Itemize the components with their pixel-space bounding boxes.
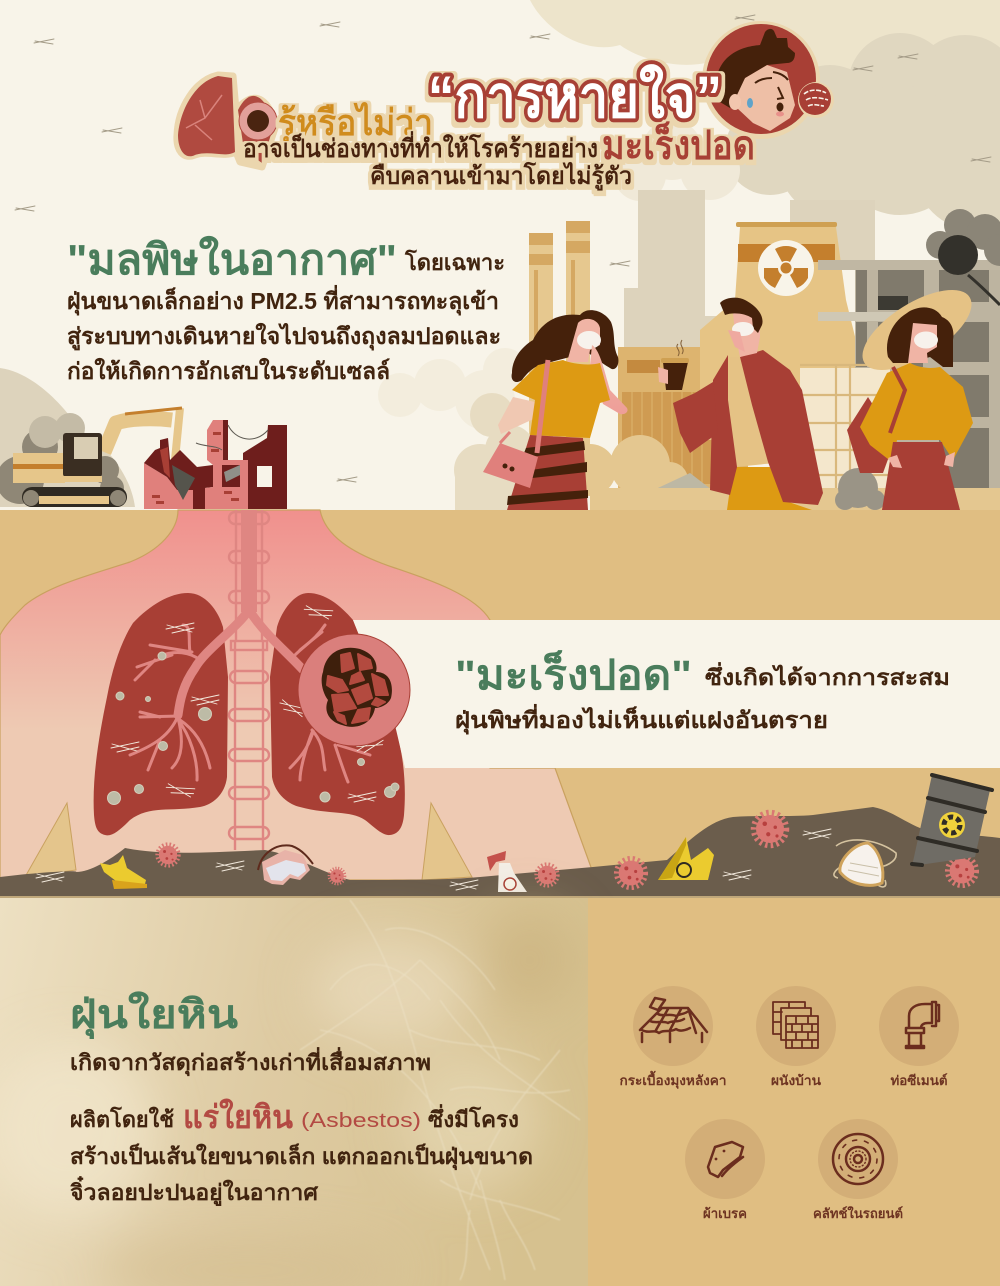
title line two: อาจเป็นช่องทางที่ทำให้โรคร้ายอย่าง: [243, 131, 598, 163]
cooling tower: [700, 227, 870, 440]
panel: lung cancer text: "มะเร็งปอด": [455, 650, 692, 698]
person: woman with bag: [483, 310, 628, 510]
title line two: มะเร็งปอด: [602, 120, 755, 168]
title lockup: [177, 21, 834, 191]
title line two: [243, 120, 755, 168]
person: man with coffee: [658, 298, 823, 510]
tan cloud by woman: [454, 393, 535, 510]
heading: air pollution text block: ก่อให้เกิดการอักเสบในระดับเซลล์: [67, 357, 390, 384]
asbestos text block: จิ๋วลอยปะปนอยู่ในอากาศ: [70, 1176, 319, 1207]
tall grey building: [624, 190, 760, 360]
ground with medical waste: [0, 775, 1000, 898]
asbestos background: [0, 898, 588, 1286]
icon: coughing man's face: [702, 21, 834, 139]
excavator: [13, 408, 195, 507]
ruined brick building: [144, 420, 287, 509]
smoke clouds top right: [530, 0, 1000, 230]
dust particles: [108, 652, 399, 804]
cream clouds middle: [378, 348, 527, 430]
icon: biohazard bag: [658, 837, 714, 880]
top background: [0, 0, 1000, 510]
heading: air pollution text block: "มลพิษในอากาศ": [67, 235, 397, 283]
title line one: รู้หรือไม่ว่า: [278, 101, 433, 146]
panel: lung cancer text: ซึ่งเกิดได้จากการสะสม: [705, 661, 950, 690]
icon: radiation symbol: [758, 240, 814, 296]
factory background: [529, 190, 1000, 510]
grey ruined building: [855, 268, 1000, 503]
icon: brake pad: ผ้าเบรค: [703, 1206, 747, 1221]
asbestos text block: ซึ่งมีโครง: [428, 1103, 519, 1132]
panel: lung cancer text: [353, 620, 1000, 768]
tan band background: [0, 510, 1000, 898]
icon: radioactive barrel: [912, 775, 992, 866]
icon: dust mask: [834, 840, 896, 887]
heading: air pollution text block: ฝุ่นขนาดเล็กอย่าง PM2.5 ที่สามารถทะลุเข้า: [67, 284, 499, 316]
asbestos text block: เกิดจากวัสดุก่อสร้างเก่าที่เสื่อมสภาพ: [70, 1046, 431, 1077]
icon: spray bottle: [487, 851, 527, 892]
asbestos text block: แร่ใยหิน: [183, 1098, 293, 1135]
icon: cement pipe: ท่อซีเมนต์: [890, 1073, 948, 1088]
person: woman with hat: [847, 274, 984, 510]
heading: air pollution text block: โดยเฉพาะ: [404, 249, 505, 275]
icon: lung with tumour: [177, 75, 277, 167]
icon: rubber gloves: [100, 855, 147, 889]
title line one: [278, 63, 722, 146]
fibres on ground: [36, 829, 831, 890]
dark smoke and wrecking ball: [926, 209, 1000, 266]
bronchi: [130, 610, 370, 782]
heading: air pollution text block: [67, 235, 505, 384]
icon: roof tiles: [620, 986, 726, 1089]
ground dust clouds: [564, 435, 688, 498]
asbestos text block: ฝุ่นใยหิน: [70, 991, 238, 1040]
asbestos text block: [70, 991, 533, 1207]
icon: brake pad: [685, 1119, 765, 1221]
asbestos text block: (Asbestos): [301, 1110, 421, 1132]
left smoke behind excavator: [0, 368, 135, 507]
icon: house wall: [756, 986, 836, 1088]
icon: cement pipe: [879, 986, 959, 1088]
asbestos text block: สร้างเป็นเส้นใยขนาดเล็ก แตกออกเป็นฝุ่นขนาด: [70, 1142, 533, 1171]
tumour magnifier: [298, 634, 410, 746]
asbestos products panel: [588, 898, 1000, 1286]
icon: car clutch: คลัทช์ในรถยนต์: [813, 1205, 903, 1221]
icon: viruses: [157, 813, 976, 887]
lungs: [94, 510, 405, 835]
icon: house wall: ผนังบ้าน: [771, 1073, 821, 1088]
left lung: [94, 593, 228, 835]
spine and trachea: [229, 510, 269, 850]
right lung: [270, 593, 405, 835]
icon: goggles: [258, 845, 313, 885]
title line three: คืบคลานเข้ามาโดยไม่รู้ตัว: [370, 161, 632, 191]
body silhouette: [0, 510, 592, 880]
bronchial tree: [241, 510, 257, 612]
arm gaps: [25, 803, 472, 880]
icon: car clutch: [813, 1119, 903, 1221]
asbestos text block: ผลิตโดยใช้: [70, 1106, 174, 1132]
title line one: “การหายใจ”: [428, 63, 722, 130]
heading: air pollution text block: สู่ระบบทางเดินหายใจไปจนถึงถุงลมปอดและ: [67, 322, 501, 351]
chimneys: [529, 221, 590, 463]
panel: lung cancer text: ฝุ่นพิษที่มองไม่เห็นแต่แฝงอันตราย: [455, 703, 828, 735]
white fibres: [111, 604, 385, 802]
factory block: [618, 347, 748, 510]
icon: coffee cup: [658, 340, 689, 390]
scattered dust fibres: [15, 15, 991, 482]
icon: roof tiles: กระเบื้องมุงหลังคา: [620, 1070, 726, 1089]
scaffolding: [800, 368, 890, 498]
